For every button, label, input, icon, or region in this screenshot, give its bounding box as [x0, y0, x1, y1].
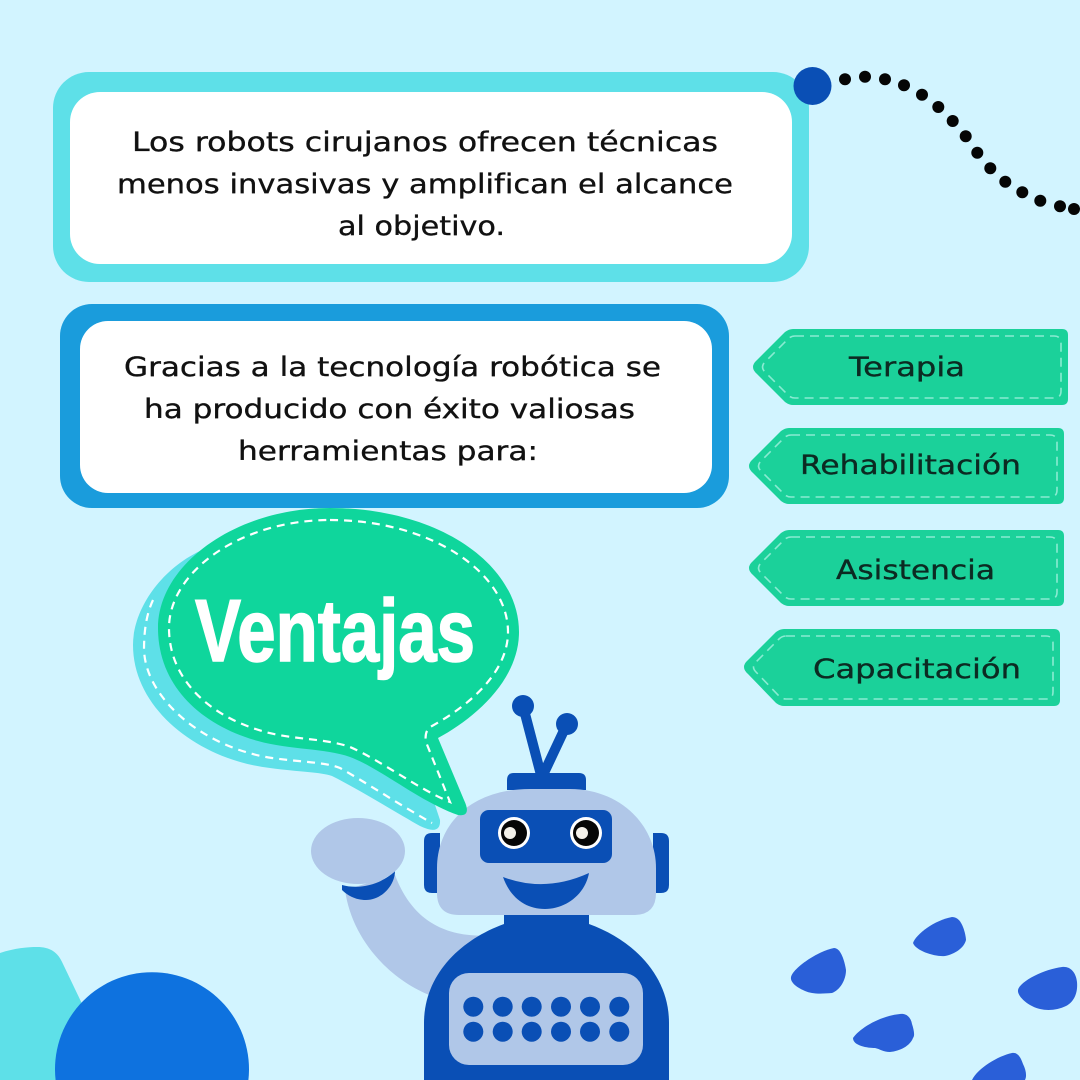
decoration: bottom-left blobs	[0, 947, 249, 1080]
icon: blue node	[794, 67, 832, 105]
robot chest panel	[449, 973, 643, 1065]
tag: Capacitación: Capacitación	[813, 654, 1021, 685]
text block: robots cirujanos	[117, 127, 733, 242]
speech bubble: Ventajas	[133, 508, 519, 830]
heading: Ventajas: Ventajas	[195, 581, 475, 680]
robot arm and hand	[311, 818, 495, 996]
text block: robots cirujanos: Los robots cirujanos ofrecen técnicas	[132, 127, 718, 158]
dotted curve	[839, 71, 1080, 215]
tag: Terapia	[753, 329, 1068, 405]
robot ears	[424, 833, 669, 893]
text block: robots cirujanos: menos invasivas y amplifican el alcance	[117, 169, 733, 200]
robot antennas	[507, 695, 586, 790]
tag: Rehabilitación	[749, 428, 1064, 504]
panel: robots cirujanos	[53, 72, 809, 282]
tag: Asistencia: Asistencia	[836, 555, 995, 586]
tag: Terapia: Terapia	[848, 352, 965, 383]
tag: Asistencia	[749, 530, 1064, 606]
text block: tecnología robótica: Gracias a la tecnología robótica se	[124, 352, 661, 383]
text block: robots cirujanos: al objetivo.	[338, 211, 505, 242]
text block: tecnología robótica: herramientas para:	[238, 436, 538, 467]
decoration: bottom-right blue leaves	[791, 917, 1077, 1080]
panel: tecnología robótica	[60, 304, 729, 508]
robot mouth	[503, 873, 589, 909]
robot neck and body	[424, 910, 669, 1080]
robot head	[437, 789, 656, 915]
robot	[311, 695, 669, 1080]
text block: tecnología robótica: ha producido con éxito valiosas	[144, 394, 635, 425]
tag: Capacitación	[744, 629, 1060, 706]
robot visor and eyes	[480, 810, 612, 863]
tag: Rehabilitación: Rehabilitación	[800, 450, 1021, 481]
text block: tecnología robótica	[124, 352, 661, 467]
